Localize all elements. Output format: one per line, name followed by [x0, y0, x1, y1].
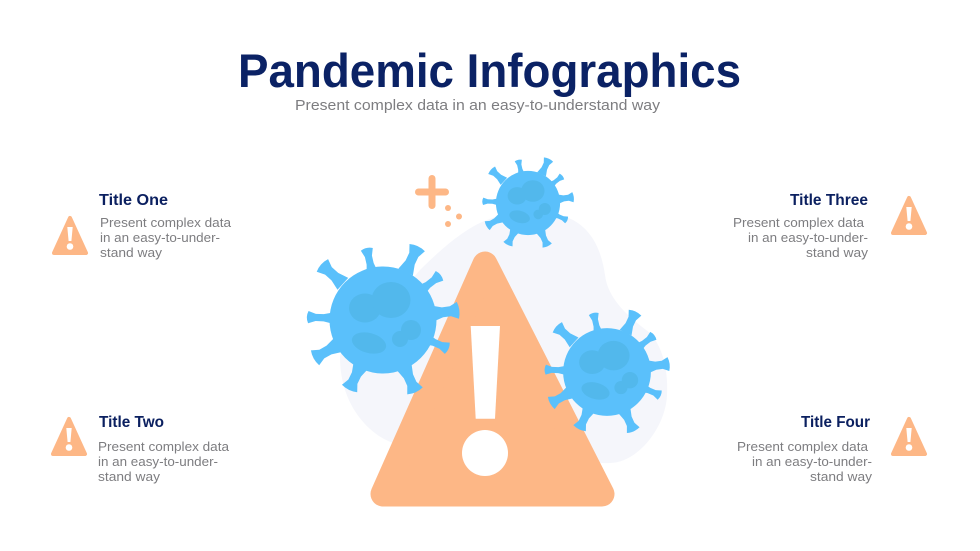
panel: title four — [737, 414, 925, 484]
icon: warning three — [893, 198, 925, 233]
text: body four — [737, 439, 873, 484]
sparkle plus and dots — [415, 175, 462, 227]
text: body two: in an easy-to-under- — [98, 454, 218, 469]
text: body four: Present complex data — [737, 439, 869, 454]
virus: top — [482, 157, 574, 248]
heading: title one: Title One — [99, 192, 168, 209]
heading: title three: Title Three — [790, 192, 868, 209]
panel: title two — [53, 414, 230, 484]
icon: warning four — [893, 419, 925, 454]
panel: title one — [54, 192, 232, 260]
subtitle: Present complex data in an easy-to-understand way — [295, 97, 661, 114]
text: body one — [100, 215, 232, 260]
panel: title three — [733, 192, 925, 260]
text: body two: stand way — [98, 469, 161, 484]
text: body one: Present complex data — [100, 215, 232, 230]
background blob — [340, 212, 667, 463]
warning triangle — [383, 264, 602, 494]
icon: warning one — [54, 218, 86, 253]
title: Pandemic Infographics — [238, 44, 741, 97]
virus: large left — [307, 243, 460, 396]
icon: warning two — [53, 419, 85, 454]
heading: title four: Title Four — [801, 414, 870, 431]
text: body one: in an easy-to-under- — [100, 230, 220, 245]
text: body three: stand way — [806, 245, 869, 260]
text: body four: stand way — [810, 469, 873, 484]
heading: title two: Title Two — [99, 414, 164, 431]
text: body two: Present complex data — [98, 439, 230, 454]
text: body two — [98, 439, 230, 484]
text: body three: in an easy-to-under- — [748, 230, 868, 245]
text: body four: in an easy-to-under- — [752, 454, 872, 469]
text: body three: Present complex data — [733, 215, 865, 230]
virus: right — [544, 309, 671, 434]
text: body one: stand way — [100, 245, 163, 260]
text: body three — [733, 215, 869, 260]
central illustration — [307, 157, 671, 494]
